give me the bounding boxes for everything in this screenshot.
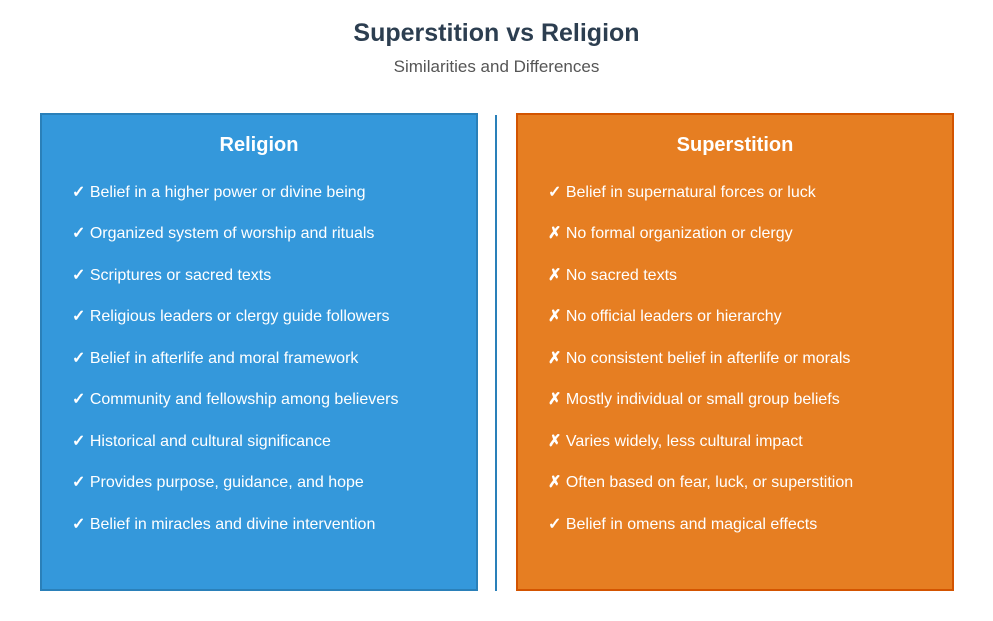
- list: religion items: ✓ Scriptures or sacred texts: [72, 267, 271, 284]
- list: religion items: ✓ Belief in afterlife and moral framework: [72, 350, 358, 367]
- list: superstition items: ✗ No sacred texts: [548, 267, 677, 284]
- list: religion items: ✓ Belief in miracles and divine intervention: [72, 516, 375, 533]
- list: religion items: ✓ Organized system of worship and rituals: [72, 225, 374, 242]
- list: superstition items: ✗ Varies widely, less cultural impact: [548, 433, 803, 450]
- list: religion items: [72, 184, 398, 533]
- heading: superstition: Superstition: [677, 134, 793, 156]
- list: superstition items: ✓ Belief in supernatural forces or luck: [548, 184, 816, 201]
- list: religion items: ✓ Religious leaders or clergy guide followers: [72, 308, 390, 325]
- list: religion items: ✓ Community and fellowship among believers: [72, 391, 398, 408]
- list: superstition items: ✗ Often based on fear, luck, or superstition: [548, 474, 853, 491]
- list: superstition items: [548, 184, 853, 533]
- list: superstition items: ✗ No official leaders or hierarchy: [548, 308, 782, 325]
- subtitle: Similarities and Differences: [394, 57, 599, 76]
- list: superstition items: ✗ Mostly individual or small group beliefs: [548, 391, 840, 408]
- panel: religion: [40, 113, 478, 591]
- list: religion items: ✓ Historical and cultural significance: [72, 433, 331, 450]
- list: superstition items: ✗ No consistent belief in afterlife or morals: [548, 350, 850, 367]
- title: Superstition vs Religion: [353, 19, 640, 47]
- heading: religion: Religion: [220, 134, 298, 156]
- list: superstition items: ✗ No formal organization or clergy: [548, 225, 793, 242]
- panel: superstition: [516, 113, 954, 591]
- divider: [495, 115, 497, 591]
- list: religion items: ✓ Belief in a higher power or divine being: [72, 184, 366, 201]
- list: superstition items: ✓ Belief in omens and magical effects: [548, 516, 817, 533]
- list: religion items: ✓ Provides purpose, guidance, and hope: [72, 474, 364, 491]
